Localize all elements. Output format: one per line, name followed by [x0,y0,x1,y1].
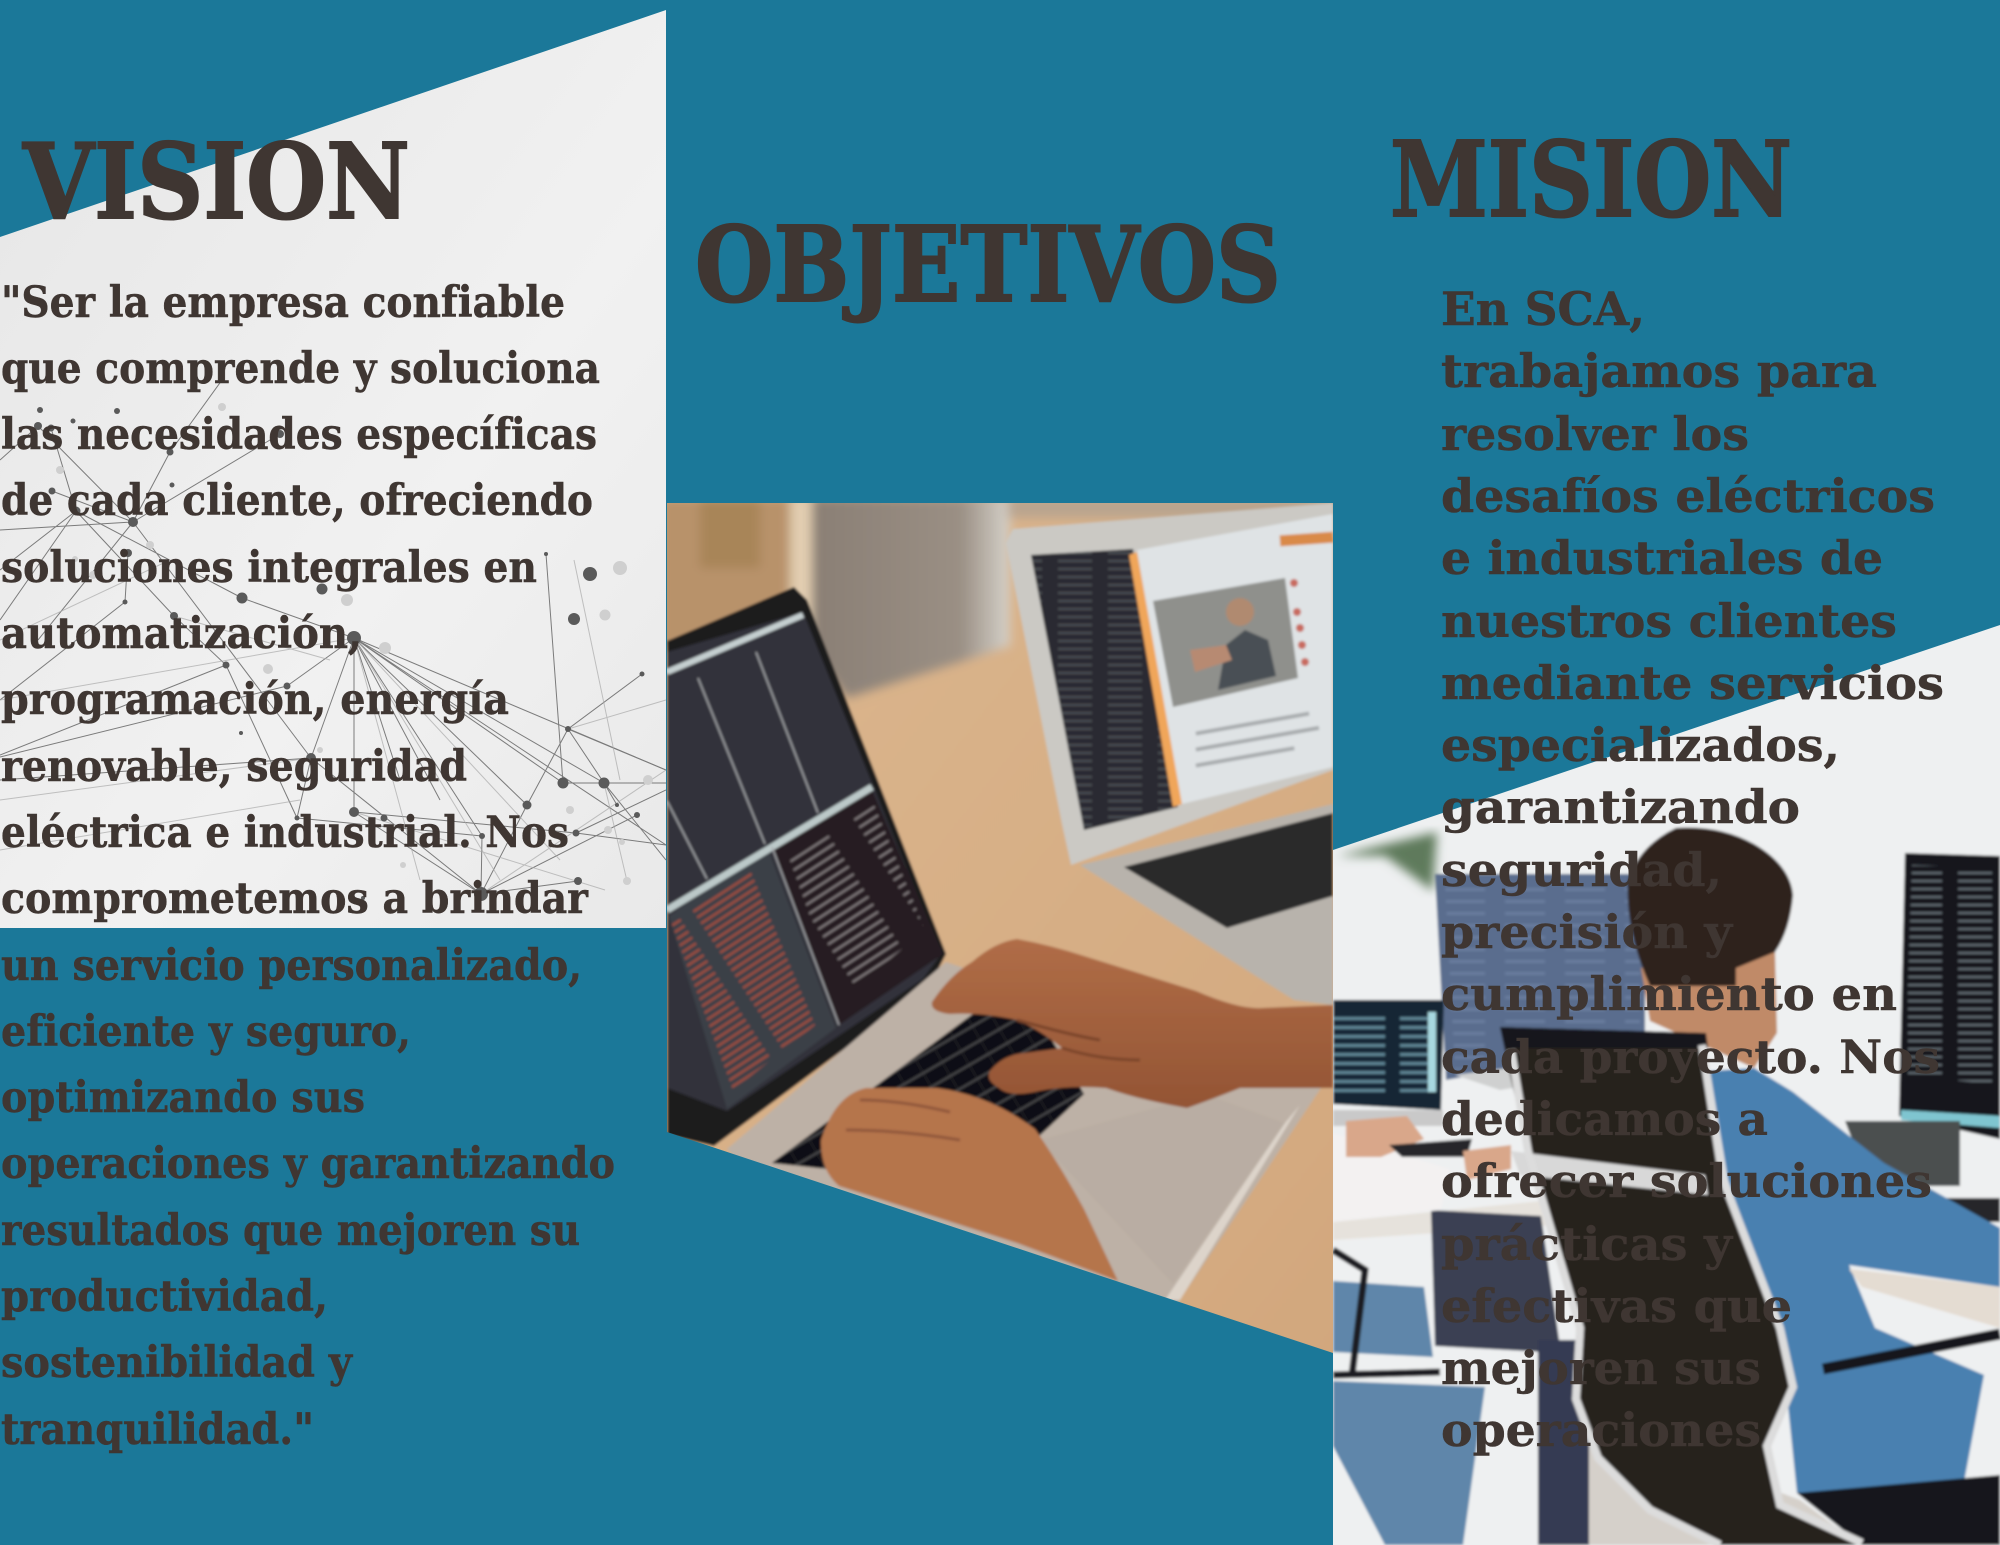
desk surface [660,498,1340,1368]
text block: vision statement: sostenibilidad y [1,1338,354,1388]
wall [1325,615,2000,1545]
text block: mission statement: e industriales de [1441,531,1883,585]
text block: mission statement: seguridad, [1441,843,1722,897]
text block: mission statement: especializados, [1441,718,1840,772]
text block: mission statement: cada proyecto. Nos [1441,1030,1940,1084]
front laptop deck and keyboard [727,962,1321,1310]
man seen from behind [1628,828,2000,1545]
text block: mission statement: operaciones [1441,1403,1761,1457]
hands [821,939,1333,1281]
text block: vision statement: resultados que mejoren su [1,1206,580,1256]
text block: mission statement: mediante servicios [1441,656,1944,710]
panel: office photo [1325,615,2000,1545]
text block: vision statement: renovable, seguridad [1,742,467,792]
front laptop screen [667,587,946,1146]
text block: vision statement: eficiente y seguro, [1,1007,411,1057]
text block: mission statement: cumplimiento en [1441,967,1897,1021]
plant [1337,832,1437,891]
right monitor [1845,853,2000,1222]
network graphic [0,380,666,901]
text block: mission statement: nuestros clientes [1441,594,1897,648]
title: VISION: VISION [22,120,410,243]
floor [1586,1446,1832,1545]
text block: mission statement: trabajamos para [1441,344,1877,398]
text block: vision statement: tranquilidad." [1,1405,314,1455]
text block: mission statement: efectivas que [1441,1279,1792,1333]
text block: vision statement: que comprende y soluciona [1,344,600,394]
text block: vision statement: "Ser la empresa confiable [1,278,565,328]
desk and colleague [1333,1116,1600,1545]
text block: mission statement [1441,282,1944,1457]
office chair [1500,1027,2000,1545]
text block: vision statement: programación, energía [1,675,509,725]
text block: vision statement: eléctrica e industrial. Nos [1,808,569,858]
text block: vision statement: de cada cliente, ofreciendo [1,476,593,526]
text block: vision statement: optimizando sus [1,1073,365,1123]
text block: mission statement: mejoren sus [1441,1341,1761,1395]
title: OBJETIVOS: OBJETIVOS [695,203,1281,326]
panel: vision background with network pattern [0,0,667,928]
text block: mission statement: desafíos eléctricos [1441,469,1935,523]
blurred room background [660,498,1338,698]
text block: mission statement: garantizando [1441,780,1800,834]
panel: laptop photo [660,498,1340,1368]
text block: vision statement: automatización, [1,609,362,659]
center monitor [1435,874,1645,1090]
text block: vision statement: soluciones integrales en [1,543,537,593]
text block: vision statement: productividad, [1,1272,328,1322]
text block: vision statement: un servicio personalizado, [1,941,582,991]
text block: vision statement: comprometemos a brindar [1,874,589,924]
text block: mission statement: ofrecer soluciones [1441,1154,1932,1208]
second laptop (back) [1006,503,1333,1005]
text block: mission statement: prácticas y [1441,1217,1733,1271]
text block: vision statement: las necesidades específicas [1,410,597,460]
left monitor [1333,1000,1444,1126]
text block: mission statement: En SCA, [1441,282,1645,336]
title: MISION: MISION [1390,118,1792,241]
text block: mission statement: resolver los [1441,407,1749,461]
text block: mission statement: precisión y [1441,905,1733,959]
text block: vision statement: operaciones y garantizando [1,1139,615,1189]
text block: vision statement [1,278,615,1455]
text block: mission statement: dedicamos a [1441,1092,1768,1146]
